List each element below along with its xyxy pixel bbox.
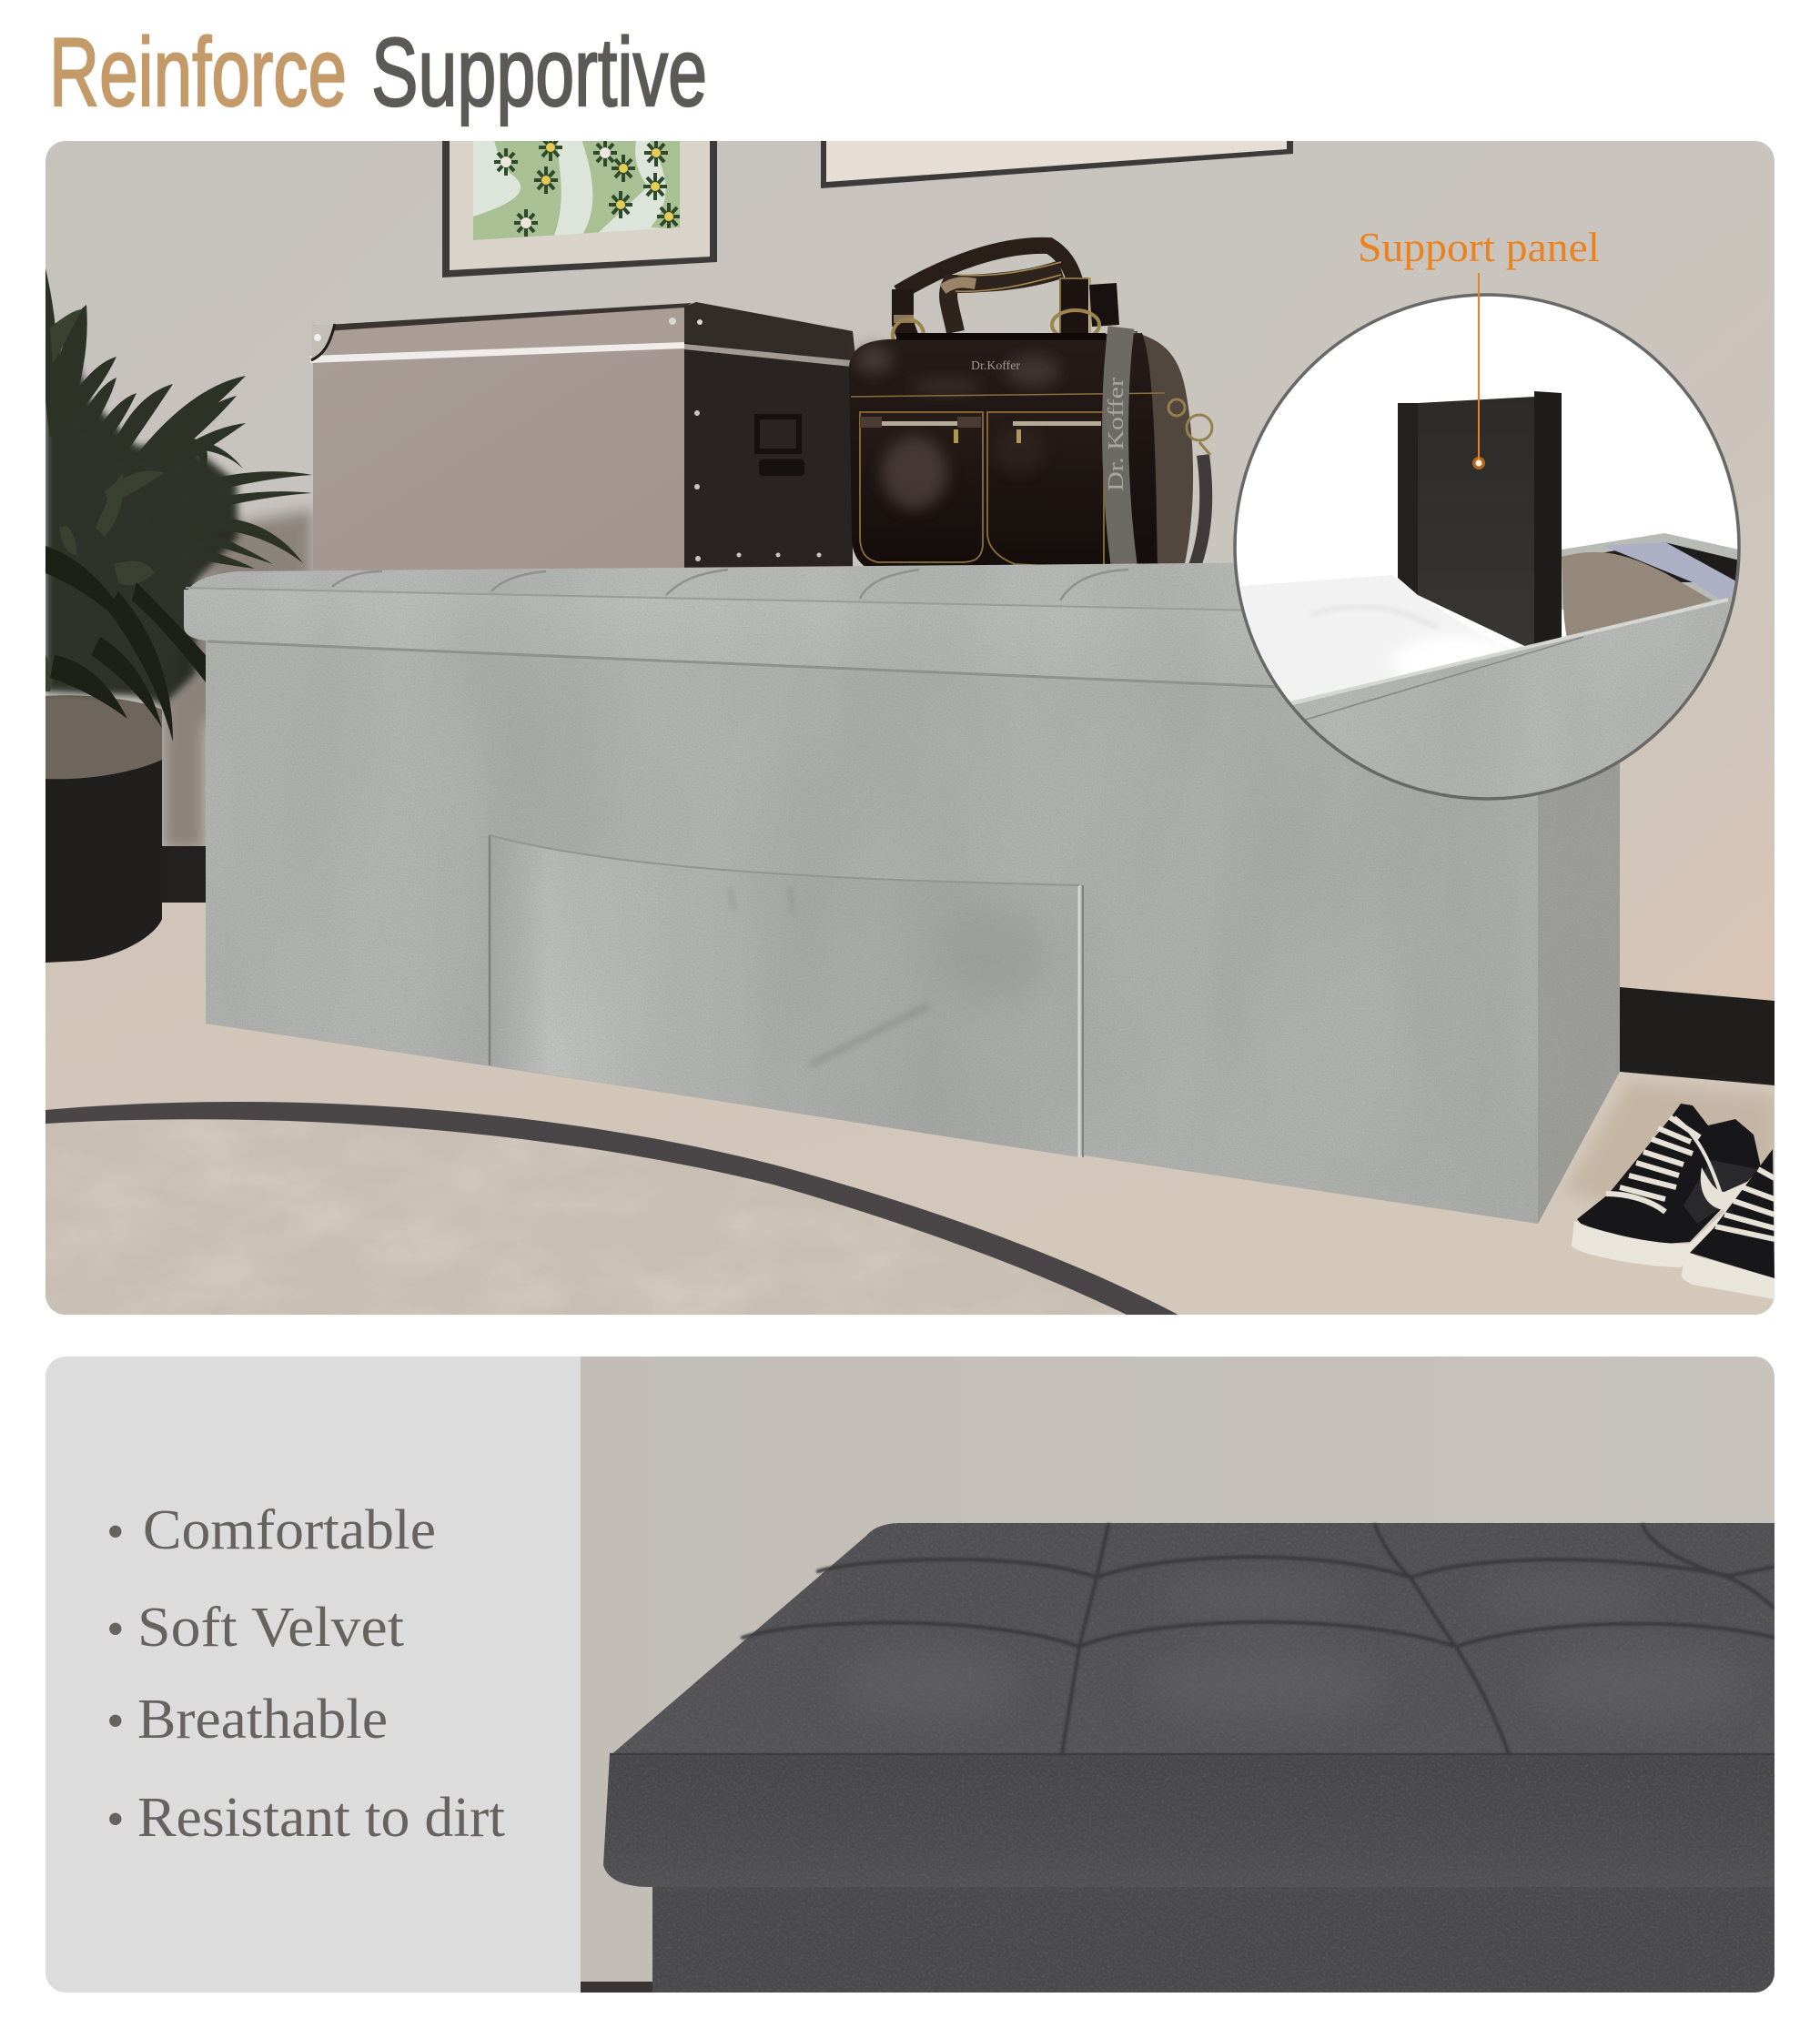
- callout leader line and dot: [1472, 273, 1485, 469]
- sneakers: [1572, 1104, 1774, 1299]
- magnifier callout: support panel: [1228, 295, 1756, 819]
- bag gusset: [1128, 331, 1193, 571]
- callout label: Support panel: [1358, 225, 1600, 270]
- title: [49, 17, 707, 126]
- potted plant: [42, 268, 312, 963]
- bag pockets: [860, 412, 1104, 569]
- tufting highlights: [837, 1577, 1747, 1720]
- laces: [1606, 1117, 1727, 1215]
- black and taupe storage box: [310, 302, 856, 573]
- leather bag: [849, 246, 1212, 573]
- left sneaker: [1572, 1104, 1763, 1267]
- right sneaker: [1682, 1149, 1774, 1299]
- leather highlights: [855, 345, 1060, 395]
- white pillow: [1228, 575, 1511, 710]
- brand text on bag: Dr.Koffer: [971, 359, 1020, 373]
- strap text: Dr. Koffer: [1105, 378, 1128, 491]
- bench body: [652, 1865, 1774, 1993]
- item: breathable: Breathable: [137, 1689, 388, 1750]
- item: resistant to dirt: •: [106, 1791, 125, 1848]
- lid front face: [603, 1754, 1774, 1887]
- left handle tab: [903, 289, 919, 368]
- item: breathable: •: [106, 1693, 125, 1750]
- folded clothes: [1603, 542, 1738, 608]
- dark velvet bench close-up: [603, 1523, 1774, 1993]
- wall behind close-up: [581, 1357, 1774, 1993]
- item: resistant to dirt: Resistant to dirt: [137, 1787, 505, 1849]
- panel: room scene with storage bench: [42, 134, 1774, 1333]
- item: soft velvet: Soft Velvet: [137, 1597, 404, 1659]
- title: Reinforce: [49, 17, 347, 126]
- bench front face: [206, 632, 1538, 1224]
- brown cushion: [1562, 552, 1713, 639]
- panel: velvet feature list and seat close-up: [46, 1357, 1774, 1993]
- bag body: [849, 333, 1158, 571]
- bench lid front edge: [184, 588, 1301, 688]
- second picture frame: [821, 136, 1293, 188]
- lid top surface: [610, 1523, 1774, 1756]
- leaves: [42, 268, 312, 569]
- round rug with dark border: [46, 1102, 1178, 1315]
- floor: [46, 903, 1774, 1315]
- tufting seams: [743, 1525, 1774, 1754]
- dark foliage mass: [46, 346, 238, 705]
- item: comfortable: •: [106, 1504, 125, 1560]
- wall shadow behind plant: [162, 510, 313, 851]
- support panel board: [1398, 391, 1562, 651]
- item: soft velvet: •: [106, 1601, 125, 1658]
- back rim of bench interior: [1562, 533, 1747, 610]
- bag handles: [891, 237, 1119, 339]
- floor shadow near sneakers: [1565, 1083, 1774, 1210]
- wall background: [46, 141, 1774, 1315]
- right side face of bench: [1538, 728, 1620, 1224]
- title: Supportive: [371, 17, 707, 126]
- shoulder strap: [1116, 328, 1212, 573]
- bench lid top with channel tufting: [184, 562, 1301, 619]
- picture frame with green floral art: [442, 134, 717, 277]
- right handle tab: [1059, 277, 1088, 359]
- front pocket: [490, 835, 1083, 1157]
- item: comfortable: Comfortable: [143, 1499, 436, 1561]
- baseboards: [162, 846, 1774, 1087]
- plant pot: [46, 695, 162, 963]
- top rail: [896, 333, 1106, 340]
- bench velvet rim foreground: [1274, 597, 1756, 819]
- feature list: [106, 1499, 505, 1849]
- swoosh: [1701, 1167, 1761, 1210]
- light text background: [46, 1357, 581, 1993]
